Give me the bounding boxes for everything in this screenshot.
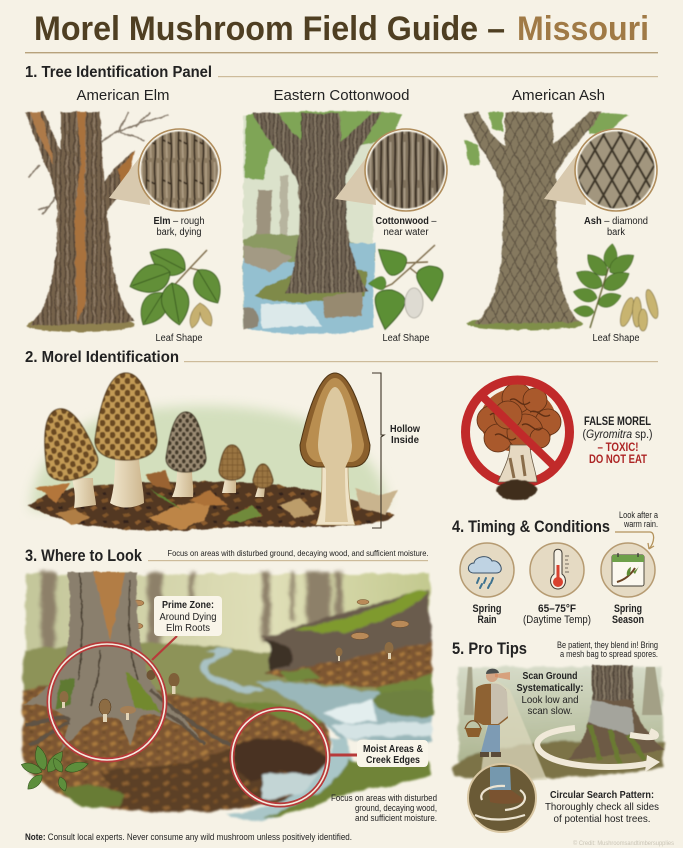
zoom wedge — [335, 150, 376, 205]
callout: prime zone: Elm Roots — [166, 622, 210, 634]
callout: prime zone: Around Dying — [160, 611, 217, 623]
false morel warning — [466, 380, 653, 500]
zoom wedge — [109, 150, 150, 205]
caption: scan ground: Systematically: — [516, 682, 584, 694]
tree name: American Ash — [512, 87, 605, 104]
caption: where to look: and sufficient moisture. — [355, 813, 437, 823]
caption: circular search: Circular Search Pattern: — [550, 789, 654, 801]
illustration: search scene — [452, 665, 665, 832]
caption: circular search: of potential host trees. — [554, 813, 650, 825]
callout: prime zone — [154, 596, 222, 636]
tip: warm rain — [619, 510, 658, 529]
panel: pro tips — [452, 639, 674, 847]
caption: scan ground: Look low and — [522, 694, 579, 706]
illustration: cottonwood and creek — [243, 111, 402, 334]
zoom wedge — [544, 150, 586, 205]
caption: scan ground — [516, 670, 584, 717]
icon: spring calendar — [601, 543, 655, 597]
caption: where to look: ground, decaying wood, — [355, 803, 437, 813]
heading: section 5: 5. Pro Tips — [452, 639, 527, 658]
heading: section 4: 4. Timing & Conditions — [452, 517, 610, 536]
warning text: DO NOT EAT — [589, 454, 647, 466]
tree: American Elm — [26, 87, 228, 344]
panel: timing and conditions — [452, 510, 658, 626]
tree name: American Elm — [76, 87, 170, 104]
section note: Focus on areas with disturbed ground, decaying wood, and sufficient moisture. — [168, 548, 428, 558]
note: Note: Consult local experts. Never consume any wild mushroom unless positively identified. — [25, 832, 352, 842]
connector: moist areas — [329, 754, 358, 756]
bark close-up: elm — [138, 129, 220, 211]
callout ring: around elm roots — [49, 644, 165, 760]
caption: scan ground: Scan Ground — [522, 670, 578, 682]
caption: where to look — [331, 793, 437, 823]
illustration: forest creek scene — [20, 572, 434, 822]
leaves: elm — [125, 241, 228, 331]
label: leaf shape: Leaf Shape — [592, 333, 640, 344]
caption: circular search: Thoroughly check all sides — [545, 801, 659, 813]
caption: where to look: Focus on areas with disturbed — [331, 793, 437, 803]
morel 4 — [219, 445, 245, 493]
illustration: morels on forest floor — [28, 373, 420, 531]
bark close-up: cottonwood — [365, 129, 447, 211]
label: leaf shape: Leaf Shape — [156, 333, 203, 344]
label: hollow inside — [390, 424, 420, 446]
tip: patience — [557, 640, 658, 659]
illustration: elm tree — [26, 112, 168, 332]
host tree — [568, 665, 665, 765]
tip: patience: a mesh bag to spread spores. — [560, 649, 658, 659]
bracket: hollow inside — [372, 373, 384, 528]
morel 3 — [166, 412, 206, 497]
tip: warm rain: Look after a — [619, 510, 658, 520]
heading: section 2: 2. Morel Identification — [25, 349, 179, 366]
morel 1 — [33, 402, 101, 508]
label: leaf shape: Leaf Shape — [382, 333, 430, 344]
tree: Eastern Cottonwood — [243, 87, 447, 344]
tip: patience: Be patient, they blend in! Bring — [557, 640, 658, 650]
caption: cottonwood: near water — [384, 227, 429, 238]
caption: ash — [584, 216, 648, 238]
morel 2 — [95, 373, 157, 508]
bark close-up: ash — [575, 129, 657, 211]
callout: moist areas: Creek Edges — [366, 754, 420, 766]
label: spring rain: Rain — [478, 614, 497, 626]
warning text: FALSE MOREL — [584, 416, 651, 428]
inset: circular footwork — [468, 764, 536, 832]
warning text: – TOXIC! — [598, 442, 638, 454]
leaves: ash — [572, 243, 660, 331]
small morels in scene — [60, 642, 394, 722]
panel: tree identification — [25, 64, 660, 344]
tree name: Eastern Cottonwood — [274, 87, 410, 104]
dying elm tree — [22, 572, 230, 752]
background trees — [464, 667, 662, 715]
warning text — [582, 416, 653, 466]
illustration: ash tree — [464, 112, 628, 330]
callout ring: creek edge — [232, 709, 328, 805]
title: Missouri — [517, 10, 649, 48]
tip: warm rain: warm rain. — [623, 519, 658, 529]
label: spring season: Season — [612, 614, 644, 626]
title: Morel Mushroom Field Guide – — [34, 10, 505, 48]
plant foreground — [20, 744, 89, 792]
credit: © Credit: Mushroomsandtimbersupplies — [573, 840, 674, 847]
tree: American Ash — [464, 87, 660, 344]
light beam — [480, 678, 547, 780]
arrow: to calendar — [615, 532, 654, 549]
label: temperature — [523, 603, 591, 626]
callout: prime zone: Prime Zone: — [162, 599, 214, 611]
heading: section 3: 3. Where to Look — [25, 546, 142, 565]
forest floor — [28, 482, 395, 531]
callout: moist areas — [357, 740, 428, 767]
label: spring season: Spring — [614, 603, 642, 615]
caption: circular search — [545, 789, 659, 825]
leaves: cottonwood — [368, 240, 445, 332]
icon: no-symbol false morel — [466, 380, 570, 500]
circular search arrow — [537, 728, 660, 772]
bracket fungi — [129, 600, 409, 640]
label: spring rain: Spring — [472, 603, 502, 615]
morel 5 — [253, 464, 273, 497]
label: spring rain — [472, 603, 502, 626]
icon: spring rain — [460, 543, 514, 597]
label: temperature: 65–75°F — [538, 603, 576, 615]
caption: elm: bark, dying — [156, 227, 202, 238]
morel cross-section — [300, 373, 370, 525]
panel: where to look — [20, 546, 437, 842]
label: spring season — [612, 603, 644, 626]
icon: thermometer — [530, 543, 584, 597]
fallen leaves — [35, 470, 398, 530]
person with basket — [465, 669, 510, 757]
heading: section 1: 1. Tree Identification Panel — [25, 64, 212, 81]
label: temperature: (Daytime Temp) — [523, 614, 591, 626]
caption: elm — [154, 216, 204, 238]
connector: prime zone — [152, 636, 177, 660]
caption: ash: Ash – diamond — [584, 216, 648, 227]
label: hollow inside: Inside — [391, 435, 419, 446]
caption: scan ground: scan slow. — [528, 705, 572, 717]
panel: morel identification — [25, 349, 658, 531]
caption: ash: bark — [607, 227, 626, 238]
caption: cottonwood — [376, 216, 437, 238]
warning text: (Gyromitra sp.) — [582, 429, 653, 441]
caption: elm: Elm – rough — [154, 216, 204, 227]
caption: cottonwood: Cottonwood – — [376, 216, 437, 227]
label: hollow inside: Hollow — [390, 424, 420, 435]
callout: moist areas: Moist Areas & — [363, 743, 423, 755]
